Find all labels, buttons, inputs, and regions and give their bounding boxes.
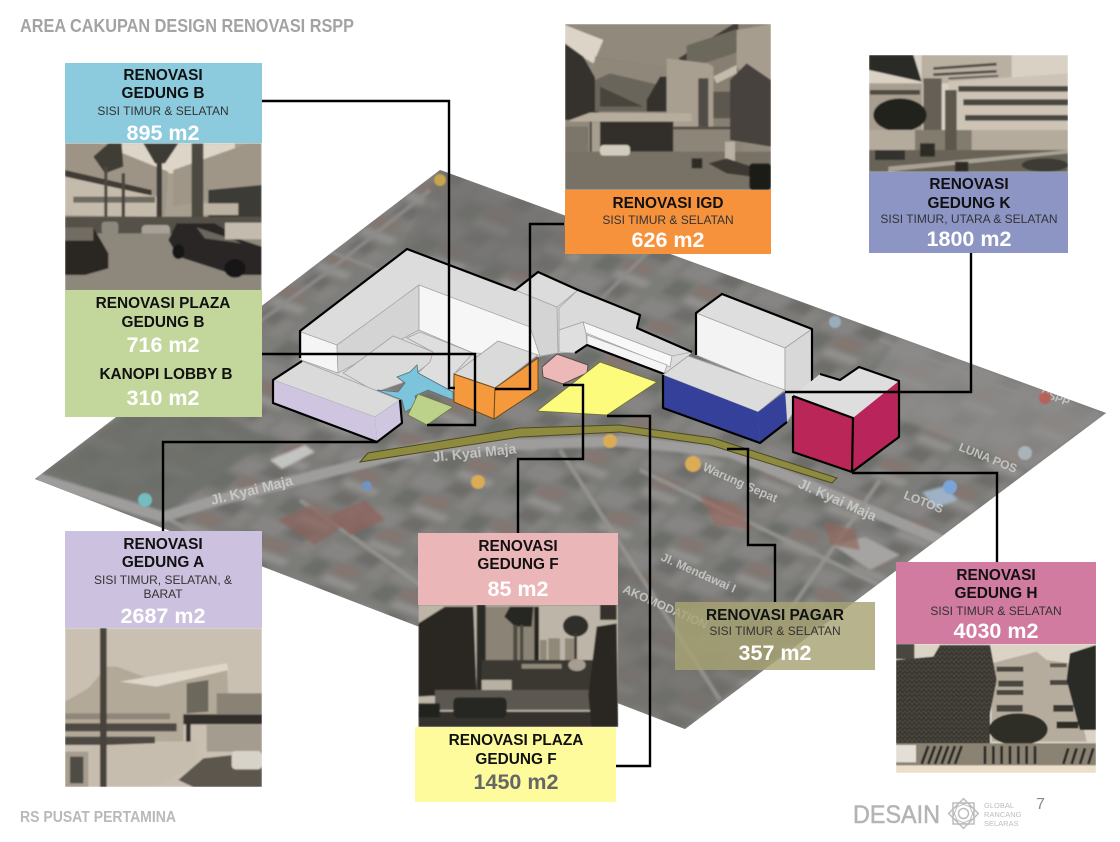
panel: gedung K bbox=[869, 55, 1068, 253]
panel: gedung K: SISI TIMUR, UTARA & SELATAN bbox=[880, 212, 1058, 226]
panel: gedung A: SISI TIMUR, SELATAN, & bbox=[94, 573, 232, 587]
panel: gedung F and plaza F: GEDUNG F bbox=[475, 751, 557, 768]
panel: gedung B and plaza B: GEDUNG B bbox=[122, 314, 204, 331]
footer: logo tagline: RANCANG bbox=[984, 810, 1022, 819]
aerial site map: LOTOS bbox=[902, 488, 945, 516]
panel: renovasi pagar: RENOVASI PAGAR bbox=[706, 607, 844, 624]
panel: gedung H: SISI TIMUR & SELATAN bbox=[930, 604, 1062, 618]
panel: gedung F and plaza F: RENOVASI PLAZA bbox=[449, 732, 583, 749]
panel: renovasi pagar: SISI TIMUR & SELATAN bbox=[709, 624, 841, 638]
aerial site map: Jl. Rw. Bambu bbox=[471, 162, 545, 198]
panel: gedung A: BARAT bbox=[143, 587, 183, 601]
photo: gedung A bbox=[65, 628, 262, 787]
panel: gedung F and plaza F bbox=[415, 533, 618, 802]
panel: gedung B and plaza B: 716 m2 bbox=[127, 333, 200, 357]
panel: gedung K: 1800 m2 bbox=[927, 227, 1011, 251]
panel: renovasi IGD bbox=[565, 24, 771, 254]
panel: gedung A: GEDUNG A bbox=[122, 554, 204, 571]
footer: logo tagline bbox=[984, 801, 1022, 828]
panel: renovasi IGD: SISI TIMUR & SELATAN bbox=[602, 213, 734, 227]
panel: gedung B and plaza B bbox=[65, 63, 262, 417]
photo: parking at gedung B bbox=[65, 140, 262, 292]
panel: gedung K: GEDUNG K bbox=[928, 195, 1010, 212]
aerial site map: Jl. Kyai Maja bbox=[796, 475, 879, 524]
photo: gedung K bbox=[869, 55, 1068, 172]
connector lines bbox=[163, 101, 997, 766]
panel: renovasi pagar: 357 m2 bbox=[739, 641, 812, 665]
plaza F: yellow bbox=[537, 362, 657, 415]
panel: renovasi pagar bbox=[675, 602, 875, 670]
panel: gedung H: GEDUNG H bbox=[955, 585, 1037, 602]
panel: gedung H: 4030 m2 bbox=[954, 619, 1038, 643]
panel: gedung A: RENOVASI bbox=[123, 536, 203, 553]
panel: gedung F and plaza F: RENOVASI bbox=[478, 538, 558, 555]
building massing model bbox=[273, 249, 899, 472]
panel: gedung F and plaza F: 1450 m2 bbox=[474, 770, 558, 794]
footer: logo tagline: GLOBAL bbox=[984, 801, 1014, 810]
gedung F: pink bbox=[542, 354, 588, 384]
panel: gedung B and plaza B: RENOVASI bbox=[123, 67, 203, 84]
gedung K: white tower and blue block bbox=[663, 294, 812, 443]
panel: gedung F and plaza F: 85 m2 bbox=[488, 577, 549, 601]
aerial site map bbox=[35, 170, 1106, 729]
aerial site map: RSPP bbox=[1039, 387, 1071, 409]
title: AREA CAKUPAN DESIGN RENOVASI RSPP bbox=[20, 15, 354, 36]
panel: gedung B and plaza B: 310 m2 bbox=[127, 386, 200, 410]
lobby B canopy: blue bbox=[377, 365, 453, 412]
footer: DESAIN logo wordmark: DESAIN bbox=[853, 801, 940, 829]
photo: gedung H bbox=[896, 644, 1096, 773]
panel: renovasi IGD: 626 m2 bbox=[632, 228, 705, 252]
gedung A: lilac bbox=[273, 361, 402, 442]
panel: gedung F and plaza F: GEDUNG F bbox=[477, 556, 559, 573]
plaza B: green bbox=[408, 394, 453, 425]
page number: 7 bbox=[1036, 796, 1045, 813]
panel: gedung A: 2687 m2 bbox=[121, 604, 205, 628]
panel: gedung A bbox=[65, 531, 262, 787]
aerial site map: Jl. Kyai Maja bbox=[209, 472, 294, 508]
IGD: orange bbox=[454, 341, 538, 419]
panel: gedung B and plaza B: GEDUNG B bbox=[122, 85, 204, 102]
footer: organisation name: RS PUSAT PERTAMINA bbox=[20, 809, 176, 826]
aerial site map: Warung Sepat bbox=[701, 460, 780, 505]
fence strip: pagar bbox=[360, 425, 837, 483]
aerial site map: Jl. Kyai Maja bbox=[432, 440, 517, 465]
photo: IGD entrance bbox=[565, 24, 771, 190]
icon: geometric logo bbox=[949, 799, 978, 828]
panel: gedung B and plaza B: SISI TIMUR & SELATAN bbox=[97, 104, 229, 118]
main L-shaped building bbox=[300, 249, 692, 392]
panel: gedung H: RENOVASI bbox=[956, 567, 1036, 584]
aerial site map: LUNA POS bbox=[957, 440, 1019, 476]
panel: gedung K: RENOVASI bbox=[929, 176, 1009, 193]
panel: gedung B and plaza B: KANOPI LOBBY B bbox=[99, 366, 233, 383]
panel: renovasi IGD: RENOVASI IGD bbox=[613, 195, 723, 212]
photo: plaza gedung F bbox=[418, 605, 618, 727]
gedung H: crimson bbox=[793, 367, 899, 472]
aerial site map: AKOMODATION bbox=[621, 582, 710, 632]
panel: gedung B and plaza B: RENOVASI PLAZA bbox=[96, 295, 230, 312]
panel: gedung B and plaza B: 895 m2 bbox=[127, 121, 200, 145]
aerial site map: Jl. Mendawai I bbox=[659, 550, 738, 596]
panel: gedung H bbox=[896, 562, 1096, 773]
footer: logo tagline: SELARAS bbox=[984, 819, 1019, 828]
